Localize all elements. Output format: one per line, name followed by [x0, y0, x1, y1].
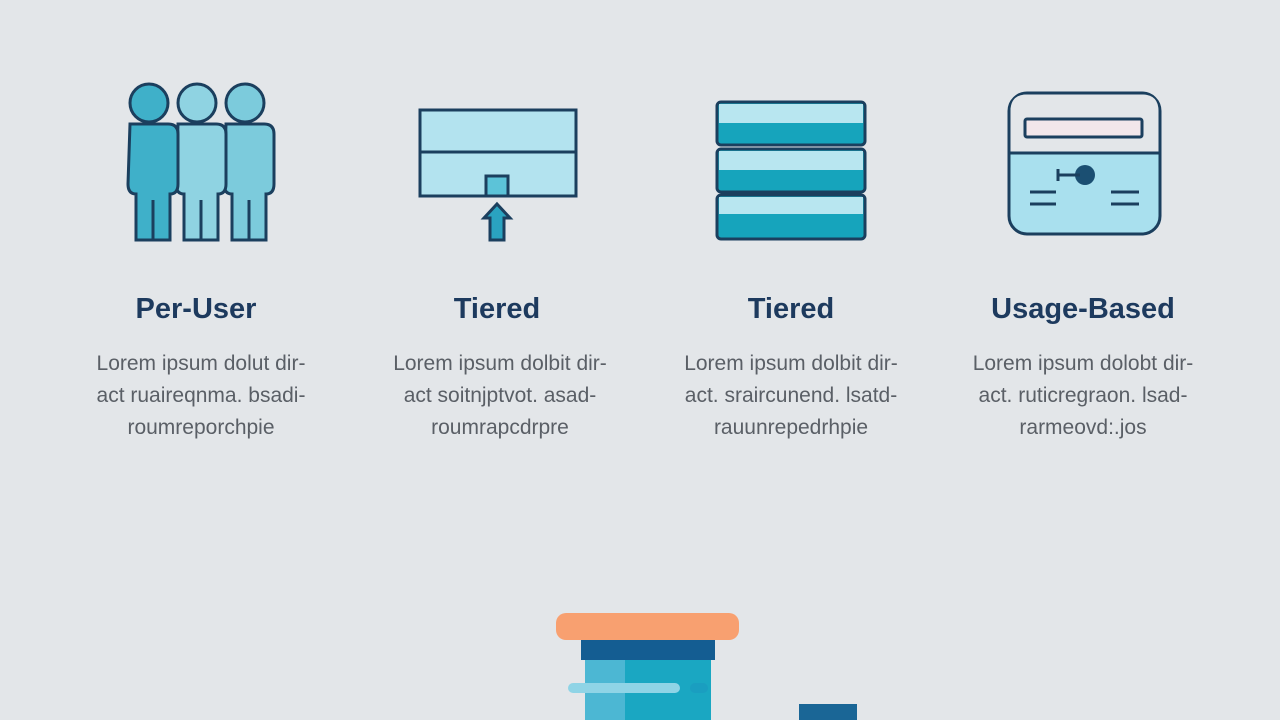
icon: people	[128, 84, 274, 240]
text: Tiered 1: Lorem ipsum dolbit dir-	[393, 352, 607, 375]
text: Usage-Based: act. ruticregraon. lsad-	[979, 384, 1187, 407]
text: Usage-Based	[973, 352, 1193, 439]
text: Per-User: Lorem ipsum dolut dir-	[97, 352, 305, 375]
text: Usage-Based: Lorem ipsum dolobt dir-	[973, 352, 1193, 375]
icon: tiered box	[420, 110, 576, 240]
heading: Tiered 2: Tiered	[748, 293, 834, 325]
text: Tiered 1: roumrapcdrpre	[431, 416, 569, 439]
text: Tiered 2: act. sraircunend. lsatd-	[685, 384, 897, 407]
text: Tiered 1: act soitnjptvot. asad-	[404, 384, 596, 407]
text: Tiered 2	[684, 352, 898, 439]
text: Per-User: roumreporchpie	[127, 416, 275, 439]
text: Tiered 2: rauunrepedrhpie	[714, 416, 868, 439]
icon: usage meter	[1009, 93, 1160, 234]
text: Usage-Based: rarmeovd:.jos	[1019, 416, 1147, 439]
heading: Usage-Based: Usage-Based	[991, 293, 1175, 325]
text: Per-User	[97, 352, 305, 439]
illustration: bottom product stack	[556, 613, 857, 720]
text: Per-User: act ruaireqnma. bsadi-	[97, 384, 305, 407]
text: Tiered 1	[393, 352, 607, 439]
heading: Per-User: Per-User	[136, 293, 256, 325]
heading: Tiered 1: Tiered	[454, 293, 540, 325]
icon: stacked tiers	[717, 102, 865, 239]
text: Tiered 2: Lorem ipsum dolbit dir-	[684, 352, 898, 375]
